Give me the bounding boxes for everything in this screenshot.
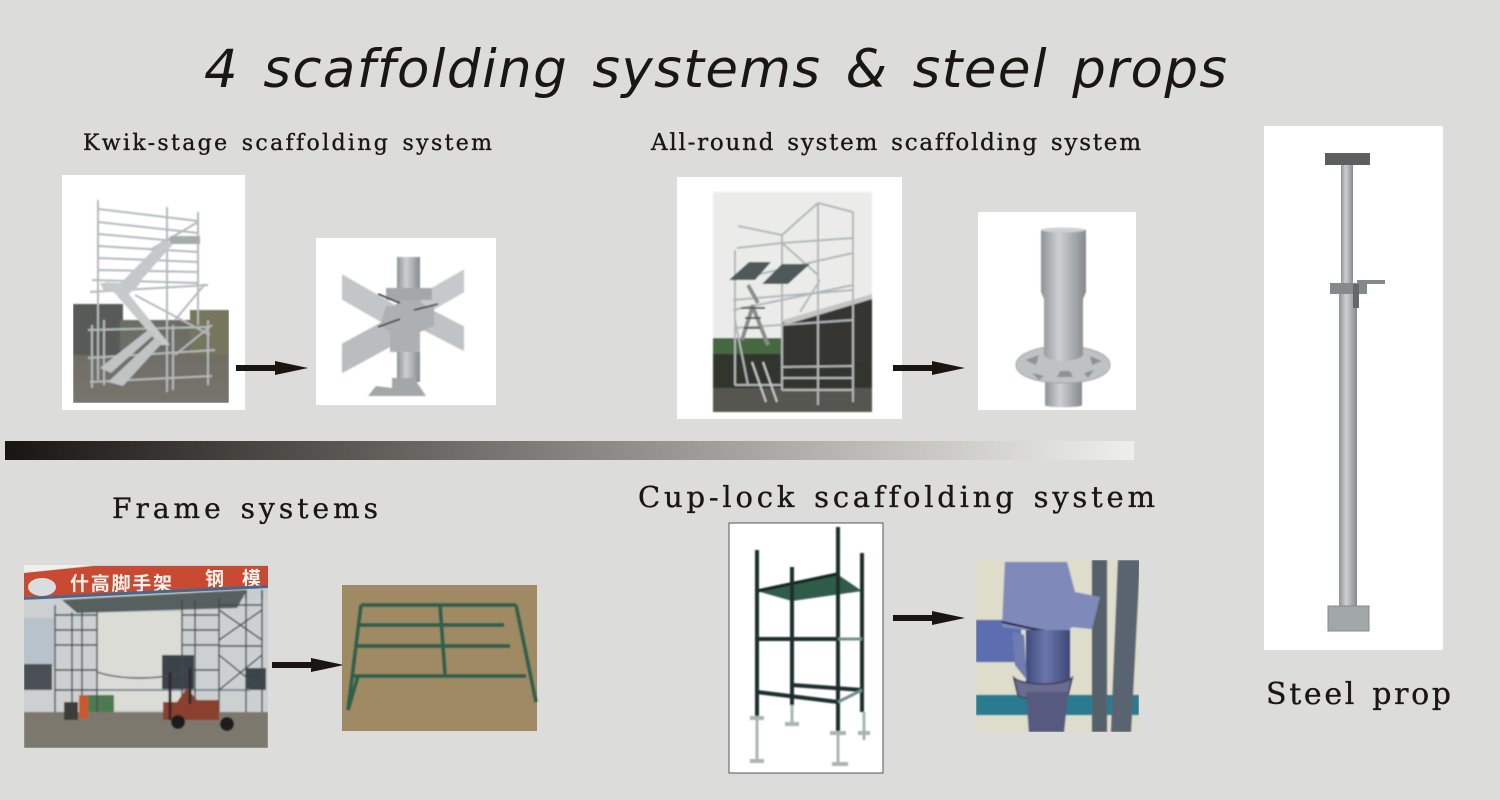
heading: Kwik-stage: Kwik-stage scaffolding system (83, 131, 492, 156)
arrow (236, 361, 308, 375)
photo: Cup-lock tower (729, 523, 883, 773)
heading: Frame systems: Frame systems (112, 492, 378, 525)
heading: All-round: All-round system scaffolding system (650, 130, 1141, 156)
photo: Kwik-stage joint (316, 238, 496, 405)
arrow (272, 658, 344, 672)
photo: Kwik-stage tower (62, 175, 245, 410)
divider gradient bar (5, 441, 1134, 460)
photo: Frame systems building (24, 565, 268, 748)
photo: Frame panel (342, 585, 537, 731)
photo: Steel prop (1264, 126, 1443, 650)
title: 4 scaffolding systems & steel props (204, 39, 1227, 100)
photo: Frame systems building: 钢模 (205, 568, 261, 590)
arrow (893, 361, 965, 375)
photo: All-round tower (677, 177, 902, 419)
photo: Cup-lock joint (976, 560, 1140, 732)
photo: Frame systems building: 什高脚手架 (70, 572, 172, 595)
arrow (893, 611, 965, 625)
heading: Cup-lock: Cup-lock scaffolding system (638, 480, 1155, 514)
caption: Steel prop: Steel prop (1266, 677, 1451, 712)
photo: All-round rosette (978, 212, 1136, 410)
